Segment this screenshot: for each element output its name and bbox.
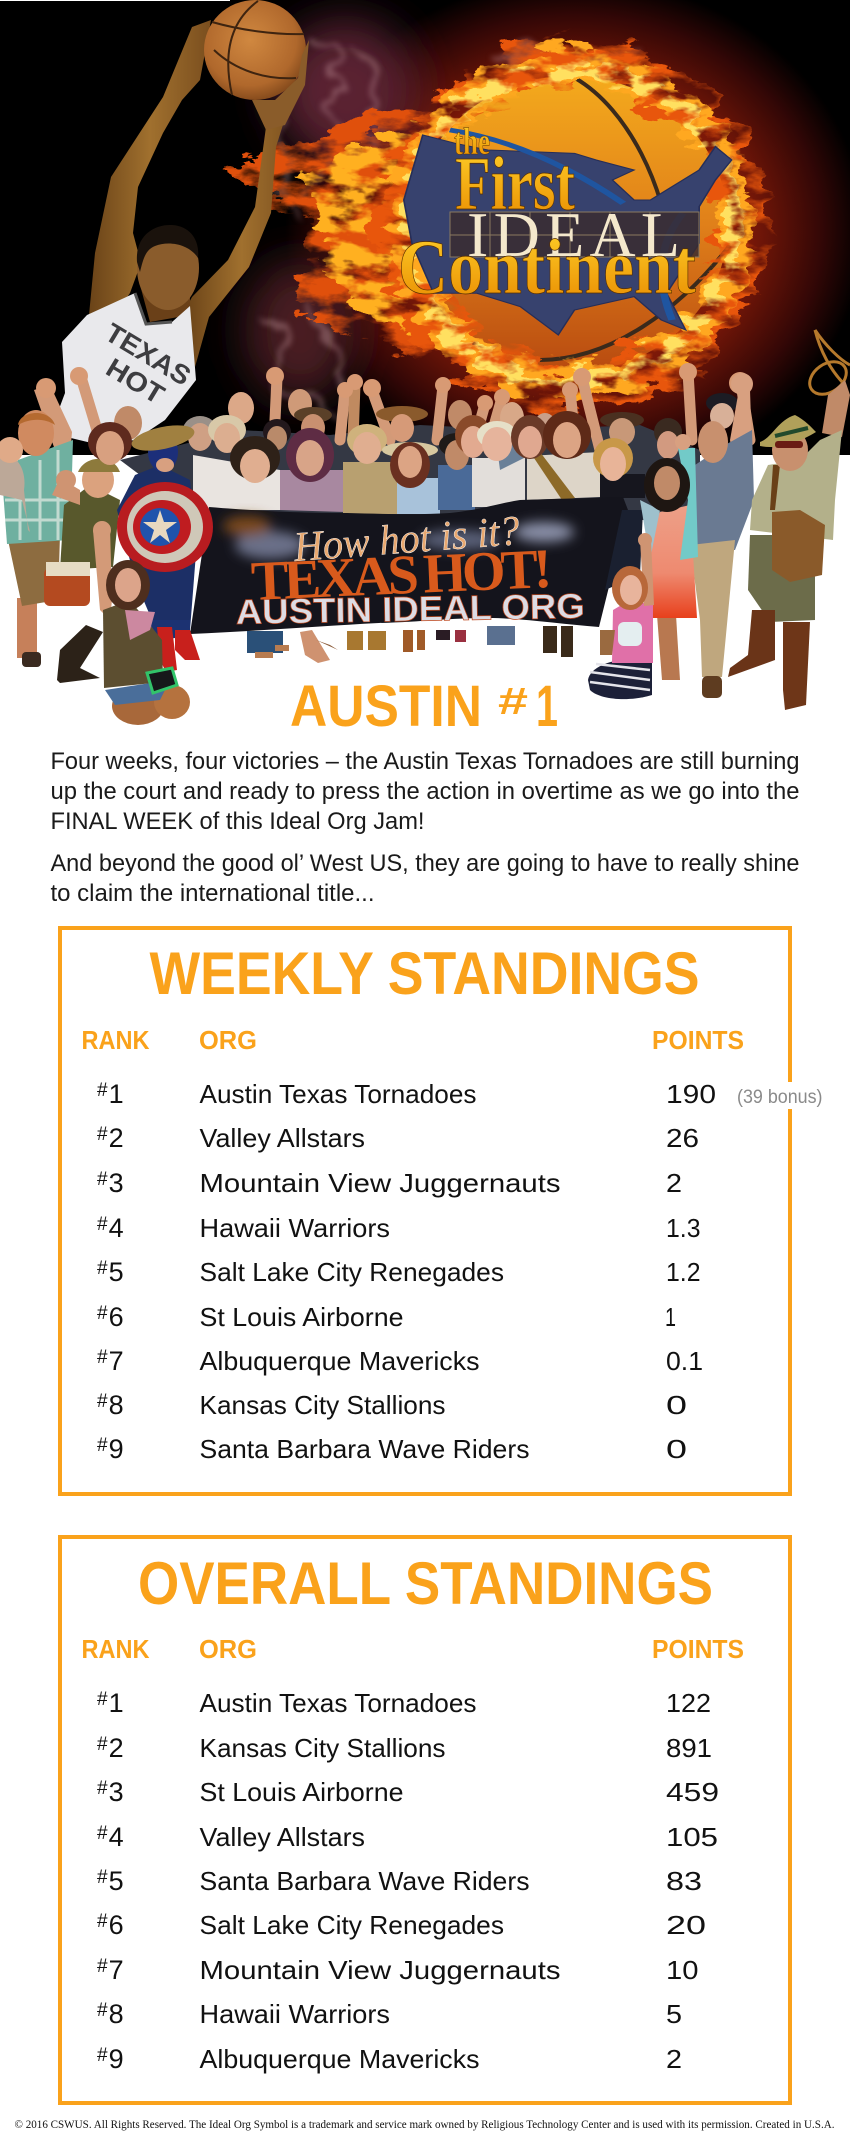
row 8: Hawaii Warriors (200, 1999, 390, 2029)
feet under banner (247, 626, 573, 663)
intro paragraph one: up the court and ready to press the action in overtime as we go into the (50, 778, 800, 805)
kneeling girl in camo (93, 521, 190, 725)
row 9 (97, 1434, 687, 1464)
player left arm (89, 20, 211, 315)
row 9: 0 (666, 1434, 687, 1464)
row 8: # (97, 1391, 108, 1412)
row 1 with bonus note: Austin Texas Tornadoes (200, 1079, 476, 1109)
panel border (60, 1537, 790, 2103)
row 2 (97, 1733, 712, 1763)
neck and head (137, 225, 199, 322)
banner line: How hot is it?: How hot is it? (291, 508, 521, 571)
column headers: ORG (199, 1025, 257, 1055)
headline: Austin #1: # (498, 681, 528, 723)
heading: weekly standings: WEEKLY STANDINGS (150, 940, 700, 1007)
girl in coral dress with teal cardigan (640, 434, 698, 680)
row 7: Mountain View Juggernauts (200, 1955, 560, 1985)
column headers: POINTS (652, 1634, 744, 1664)
row 5: 1.2 (666, 1257, 700, 1287)
row 5: # (97, 1258, 108, 1279)
row 9: 9 (109, 1434, 124, 1464)
row 5: 83 (666, 1866, 702, 1896)
row 5: Santa Barbara Wave Riders (200, 1866, 530, 1896)
basketball in flames (412, 76, 730, 372)
row 8 (97, 1999, 682, 2029)
girl in pink with striped skirt (588, 533, 654, 699)
intro paragraph two (50, 850, 800, 907)
row 2: 2 (109, 1123, 124, 1153)
row 6: 6 (109, 1302, 124, 1332)
banner cloud texture (223, 516, 574, 559)
row 5: # (97, 1867, 108, 1888)
back row of crowd (70, 363, 751, 520)
row 3: Mountain View Juggernauts (200, 1168, 560, 1198)
row 1 with bonus note: 1 (109, 1079, 124, 1109)
column headers: RANK (82, 1634, 150, 1664)
hero illustration (0, 0, 850, 725)
whip lasso (804, 330, 850, 401)
intro paragraph one: FINAL WEEK of this Ideal Org Jam! (50, 808, 424, 835)
row 7: # (97, 1347, 108, 1368)
column headers: POINTS (652, 1025, 744, 1055)
row 3: 2 (666, 1168, 682, 1198)
red fire glow (230, 0, 850, 455)
row 4: 105 (666, 1822, 718, 1852)
row 6 (97, 1302, 676, 1332)
row 9: # (97, 2045, 108, 2066)
shield (117, 482, 213, 572)
row 8: Kansas City Stallions (200, 1390, 446, 1420)
panel: weekly standings (60, 928, 822, 1494)
column headers: ORG (199, 1634, 257, 1664)
footer copyright line: © 2016 CSWUS. All Rights Reserved. The Ideal Org Symbol is a trademark and service mark owned by Religious Technology Center and is used with its permission. Created in U.S.A. (14, 2119, 835, 2131)
row 4 (97, 1822, 718, 1852)
row 6: St Louis Airborne (200, 1302, 404, 1332)
row 9: 2 (666, 2044, 682, 2074)
white jersey (50, 293, 196, 445)
row 2: 2 (109, 1733, 124, 1763)
man in blue-gray shirt (690, 373, 754, 698)
row 8: # (97, 2000, 108, 2021)
row 6: 6 (109, 1910, 124, 1940)
row 6 (97, 1910, 706, 1940)
column headers (82, 1025, 744, 1055)
back row heads (114, 389, 738, 459)
row 1: 122 (666, 1688, 711, 1718)
row 1 with bonus note: 190 (666, 1079, 716, 1109)
row 4: # (97, 1214, 108, 1235)
row 1 with bonus note: # (97, 1080, 108, 1101)
banner: How hot is it? Texas Hot! (190, 497, 643, 634)
row 4: 4 (109, 1822, 124, 1852)
player right arm (185, 77, 298, 367)
row 6: 1 (665, 1302, 676, 1332)
row 2: 26 (666, 1123, 699, 1153)
row 6: Salt Lake City Renegades (200, 1910, 504, 1940)
logo: the First Ideal Continent (398, 121, 699, 310)
row 9: Albuquerque Mavericks (200, 2044, 480, 2074)
row 5: 5 (109, 1866, 124, 1896)
flaming ring around ball (405, 62, 745, 388)
intro paragraph one: Four weeks, four victories – the Austin Texas Tornadoes are still burning (50, 748, 800, 775)
intro paragraph one (50, 748, 800, 835)
row 3: # (97, 1778, 108, 1799)
row 6: 20 (666, 1910, 706, 1940)
row 1: 1 (109, 1688, 124, 1718)
jersey lettering: HOT (101, 352, 170, 410)
row 4: # (97, 1823, 108, 1844)
row 4 (97, 1213, 700, 1243)
row 2: 891 (666, 1733, 712, 1763)
row 7: 7 (109, 1346, 124, 1376)
intro paragraph two: And beyond the good ol’ West US, they are going to have to really shine (50, 850, 800, 877)
row 5 (97, 1257, 700, 1287)
logo plaque: Ideal: IDEAL (467, 199, 680, 270)
basketball player (50, 0, 309, 445)
adventurer with satchel and boots (728, 380, 850, 710)
row 3 (97, 1168, 682, 1198)
row 7: 0.1 (666, 1346, 703, 1376)
smoke haze (245, 20, 415, 400)
right group of people (588, 373, 850, 710)
heading: overall standings: OVERALL STANDINGS (138, 1550, 713, 1617)
row 5: 5 (109, 1257, 124, 1287)
logo word: First: First (455, 142, 575, 226)
row 7 (97, 1955, 698, 1985)
row 9 (97, 2044, 682, 2074)
row 8: 8 (109, 1999, 124, 2029)
row 8: 0 (666, 1390, 687, 1420)
black backdrop (0, 1, 850, 455)
row 4: 1.3 (666, 1213, 700, 1243)
people behind banner: blouses (193, 440, 645, 514)
flames streaming left (225, 100, 460, 344)
row 5: Salt Lake City Renegades (200, 1257, 504, 1287)
row 7: # (97, 1956, 108, 1977)
row 8: 5 (666, 1999, 682, 2029)
row 6: # (97, 1303, 108, 1324)
row 7: 7 (109, 1955, 124, 1985)
row 5 (97, 1866, 702, 1896)
headline: Austin #1: 1 (536, 674, 558, 739)
banner line: Austin Ideal Org: AUSTIN IDEAL ORG (235, 587, 585, 632)
row 9: Santa Barbara Wave Riders (200, 1434, 530, 1464)
logo word: the: the (454, 121, 490, 163)
jersey lettering: TEXAS (100, 317, 196, 392)
row 2: # (97, 1124, 108, 1145)
row 1 with bonus note: (39 bonus) (737, 1087, 822, 1108)
row 3: 459 (666, 1777, 719, 1807)
map of the United States (404, 130, 732, 335)
logo word: Continent: Continent (398, 223, 696, 310)
row 1: Austin Texas Tornadoes (200, 1688, 476, 1718)
player right hand (252, 40, 309, 130)
row 2: # (97, 1734, 108, 1755)
row 9: # (97, 1435, 108, 1456)
row 3 (97, 1777, 719, 1807)
row 2 (97, 1123, 699, 1153)
woman with green hat and olive top (44, 459, 120, 683)
raised arms and fists (81, 372, 750, 450)
panel border (60, 928, 790, 1494)
row 3: 3 (109, 1168, 124, 1198)
smoke wisps (260, 30, 640, 410)
row 1 with bonus note (97, 1079, 822, 1109)
row 8: 8 (109, 1390, 124, 1420)
row 4: 4 (109, 1213, 124, 1243)
row 6: # (97, 1911, 108, 1932)
row 4: Valley Allstars (200, 1822, 365, 1852)
row 9: 9 (109, 2044, 124, 2074)
panel: overall standings (60, 1537, 790, 2103)
background bodies (120, 425, 700, 520)
banner line: Texas Hot!: TEXAS HOT! (250, 538, 553, 613)
row 7: 10 (666, 1955, 698, 1985)
row 2: Valley Allstars (200, 1123, 365, 1153)
row 7 (97, 1346, 703, 1376)
row 1 (97, 1688, 711, 1718)
left group of people (0, 373, 850, 725)
basketball (204, 0, 306, 100)
row 1: # (97, 1689, 108, 1710)
people behind banner: heads (88, 411, 633, 488)
column headers (82, 1634, 744, 1664)
row 3: # (97, 1169, 108, 1190)
row 8 (97, 1390, 687, 1420)
row 3: 3 (109, 1777, 124, 1807)
row 7: Albuquerque Mavericks (200, 1346, 480, 1376)
intro paragraph two: to claim the international title... (50, 880, 374, 907)
headline: Austin #1: AUSTIN (290, 674, 482, 739)
man in plaid shirt with baby (0, 378, 73, 667)
banner rolled right edge (605, 510, 643, 590)
row 4: Hawaii Warriors (200, 1213, 390, 1243)
row 2: Kansas City Stallions (200, 1733, 446, 1763)
row 3: St Louis Airborne (200, 1777, 404, 1807)
Captain America costume (117, 421, 200, 672)
column headers: RANK (82, 1025, 150, 1055)
